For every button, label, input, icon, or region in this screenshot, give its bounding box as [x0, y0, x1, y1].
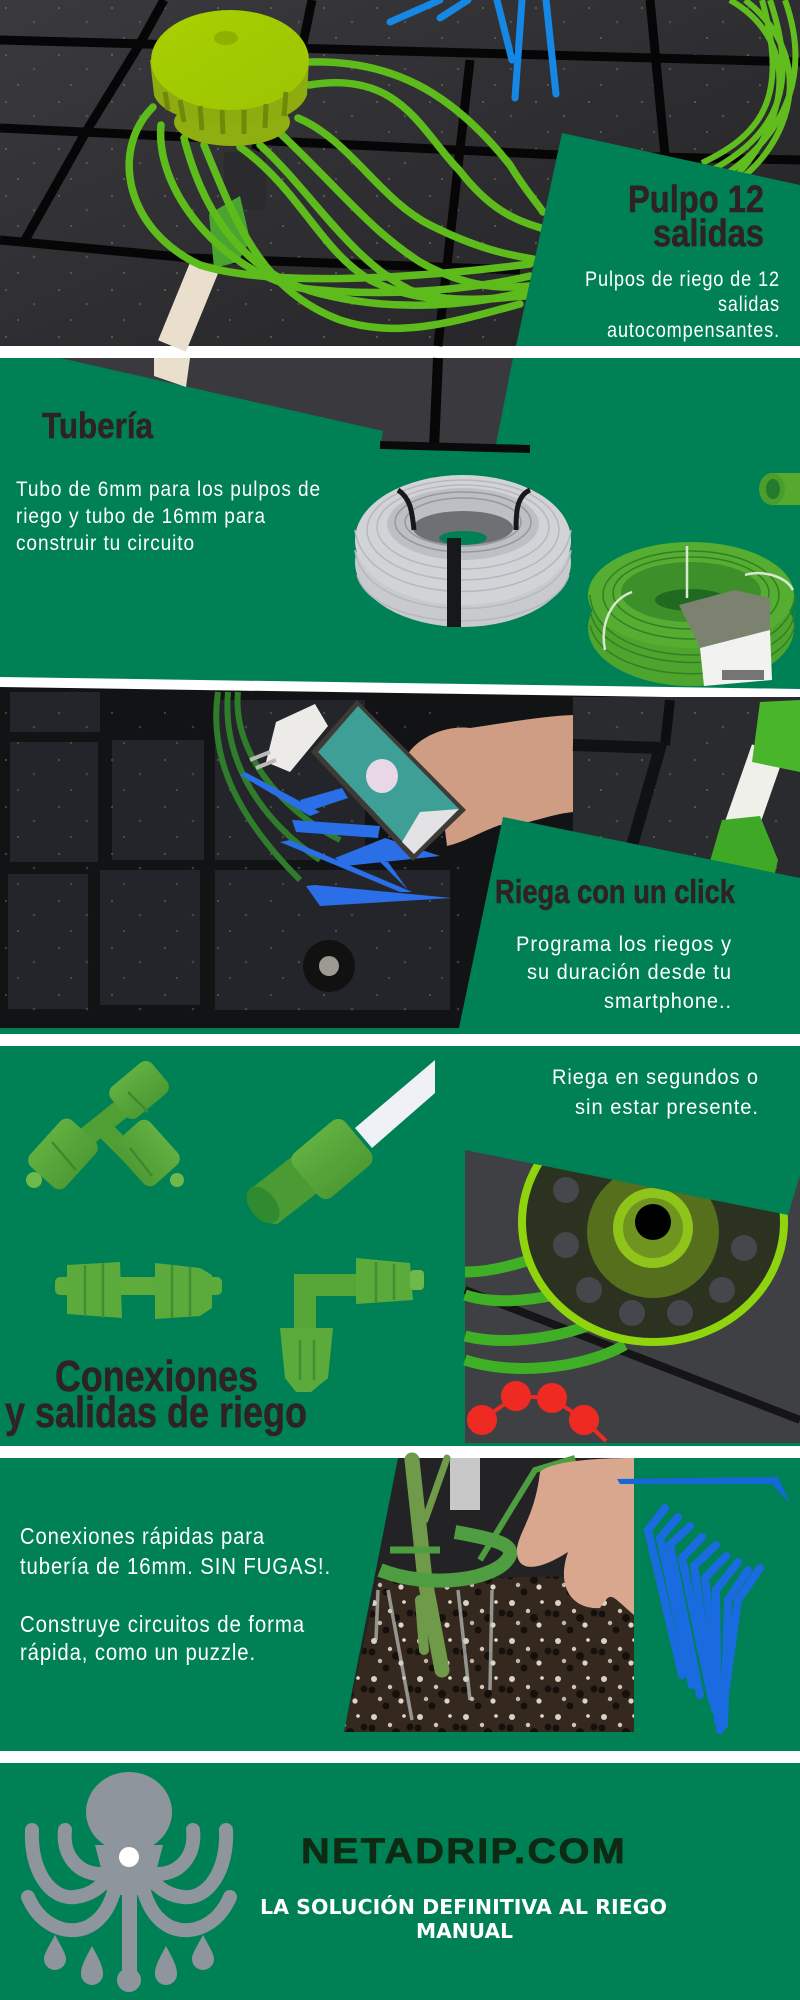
- panel: pulpo 12 salidas photo: [0, 0, 800, 346]
- panel: riega heading card: [0, 817, 800, 1034]
- heading: riega con un click: Riega con un click: [495, 873, 736, 910]
- icon: smart plug: [250, 704, 328, 772]
- text: tuberia description: [16, 478, 321, 555]
- icon: hand: [517, 1458, 634, 1615]
- heading: pulpo 12 salidas: Pulpo 12: [628, 179, 764, 221]
- text: conexiones rapidas description: Construye circuitos de forma: [20, 1611, 305, 1637]
- panel: green overlay: [440, 1046, 800, 1215]
- icon: green tube coil: [702, 0, 795, 178]
- icon: green tubes bundle: [216, 692, 340, 880]
- text: tagline: [260, 1894, 667, 1943]
- heading: netadrip.com: NETADRIP.COM: [301, 1832, 627, 1871]
- text: riega en segundos: Riega en segundos o: [552, 1066, 759, 1089]
- panel: conexiones rapidas: [0, 1458, 800, 1751]
- panel: footer: [0, 1763, 800, 2000]
- text: conexiones rapidas description: Conexiones rápidas para: [20, 1523, 265, 1549]
- text: riega description: Programa los riegos y: [516, 933, 732, 956]
- icon: smartphone: [311, 700, 466, 861]
- text: tuberia description: construir tu circuito: [16, 532, 195, 555]
- photo: white pipe close up: [573, 697, 800, 887]
- icon: water drops: [44, 1935, 214, 1985]
- icon: blue drippers: [390, 0, 556, 98]
- icon: lime hub cap: [150, 10, 309, 146]
- heading: conexiones y salidas de riego: [5, 1352, 307, 1437]
- icon: single blue dripper: [617, 1477, 790, 1503]
- panel: riega con un click photo: [0, 687, 800, 1034]
- text: tuberia description: Tubo de 6mm para los pulpos de: [16, 478, 321, 501]
- icon: hand: [400, 715, 573, 846]
- icon: threaded connector with white pipe: [240, 1060, 435, 1230]
- text: conexiones rapidas description: tubería de 16mm. SIN FUGAS!.: [20, 1553, 331, 1579]
- panel: tuberia: [0, 358, 800, 689]
- text: tagline: MANUAL: [416, 1919, 513, 1943]
- text: riega en segundos: [552, 1066, 759, 1119]
- icon: blue drippers: [240, 772, 452, 906]
- text: tuberia description: riego y tubo de 16mm para: [16, 505, 266, 528]
- icon: green tube coil with label: [588, 542, 795, 686]
- icon: octopus tubes: [129, 62, 543, 328]
- heading: pulpo 12 salidas: salidas: [653, 213, 764, 255]
- icon: white pipe: [172, 268, 204, 346]
- heading: conexiones y salidas de riego: Conexiones: [55, 1352, 258, 1401]
- icon: grey tube coil: [355, 475, 571, 627]
- photo: plant with drip ring: [344, 1458, 634, 1732]
- icon: elbow connector: [280, 1258, 424, 1392]
- heading: conexiones y salidas de riego: y salidas de riego: [5, 1388, 307, 1437]
- text: riega description: smartphone..: [604, 990, 732, 1013]
- photo strip: continued tiles: [60, 358, 530, 449]
- heading: pulpo 12 salidas: [628, 179, 764, 255]
- text: riega description: [516, 933, 732, 1013]
- panel: conexiones: [0, 1046, 800, 1446]
- icon: red chain: [469, 1383, 606, 1441]
- photo: hub underside: [465, 1102, 800, 1443]
- icon: straight connector: [55, 1262, 222, 1319]
- icon: green and black fitting: [209, 152, 266, 268]
- heading: tuberia: Tubería: [42, 405, 154, 446]
- text: tagline: LA SOLUCIÓN DEFINITIVA AL RIEGO: [260, 1894, 667, 1919]
- icon: drain: [303, 940, 355, 992]
- icon: stack of blue drippers: [648, 1508, 760, 1730]
- text: riega en segundos: sin estar presente.: [575, 1096, 759, 1119]
- text: conexiones rapidas description: rápida, como un puzzle.: [20, 1639, 256, 1665]
- text: conexiones rapidas description: [20, 1523, 331, 1665]
- icon: octopus logo: [28, 1772, 230, 1992]
- panel: pulpo heading card: [516, 133, 800, 346]
- text: pulpo description: [585, 268, 780, 342]
- icon: T connector: [24, 1057, 184, 1193]
- icon: tube end: [759, 473, 800, 505]
- text: pulpo description: salidas: [718, 293, 780, 316]
- text: riega description: su duración desde tu: [527, 961, 732, 984]
